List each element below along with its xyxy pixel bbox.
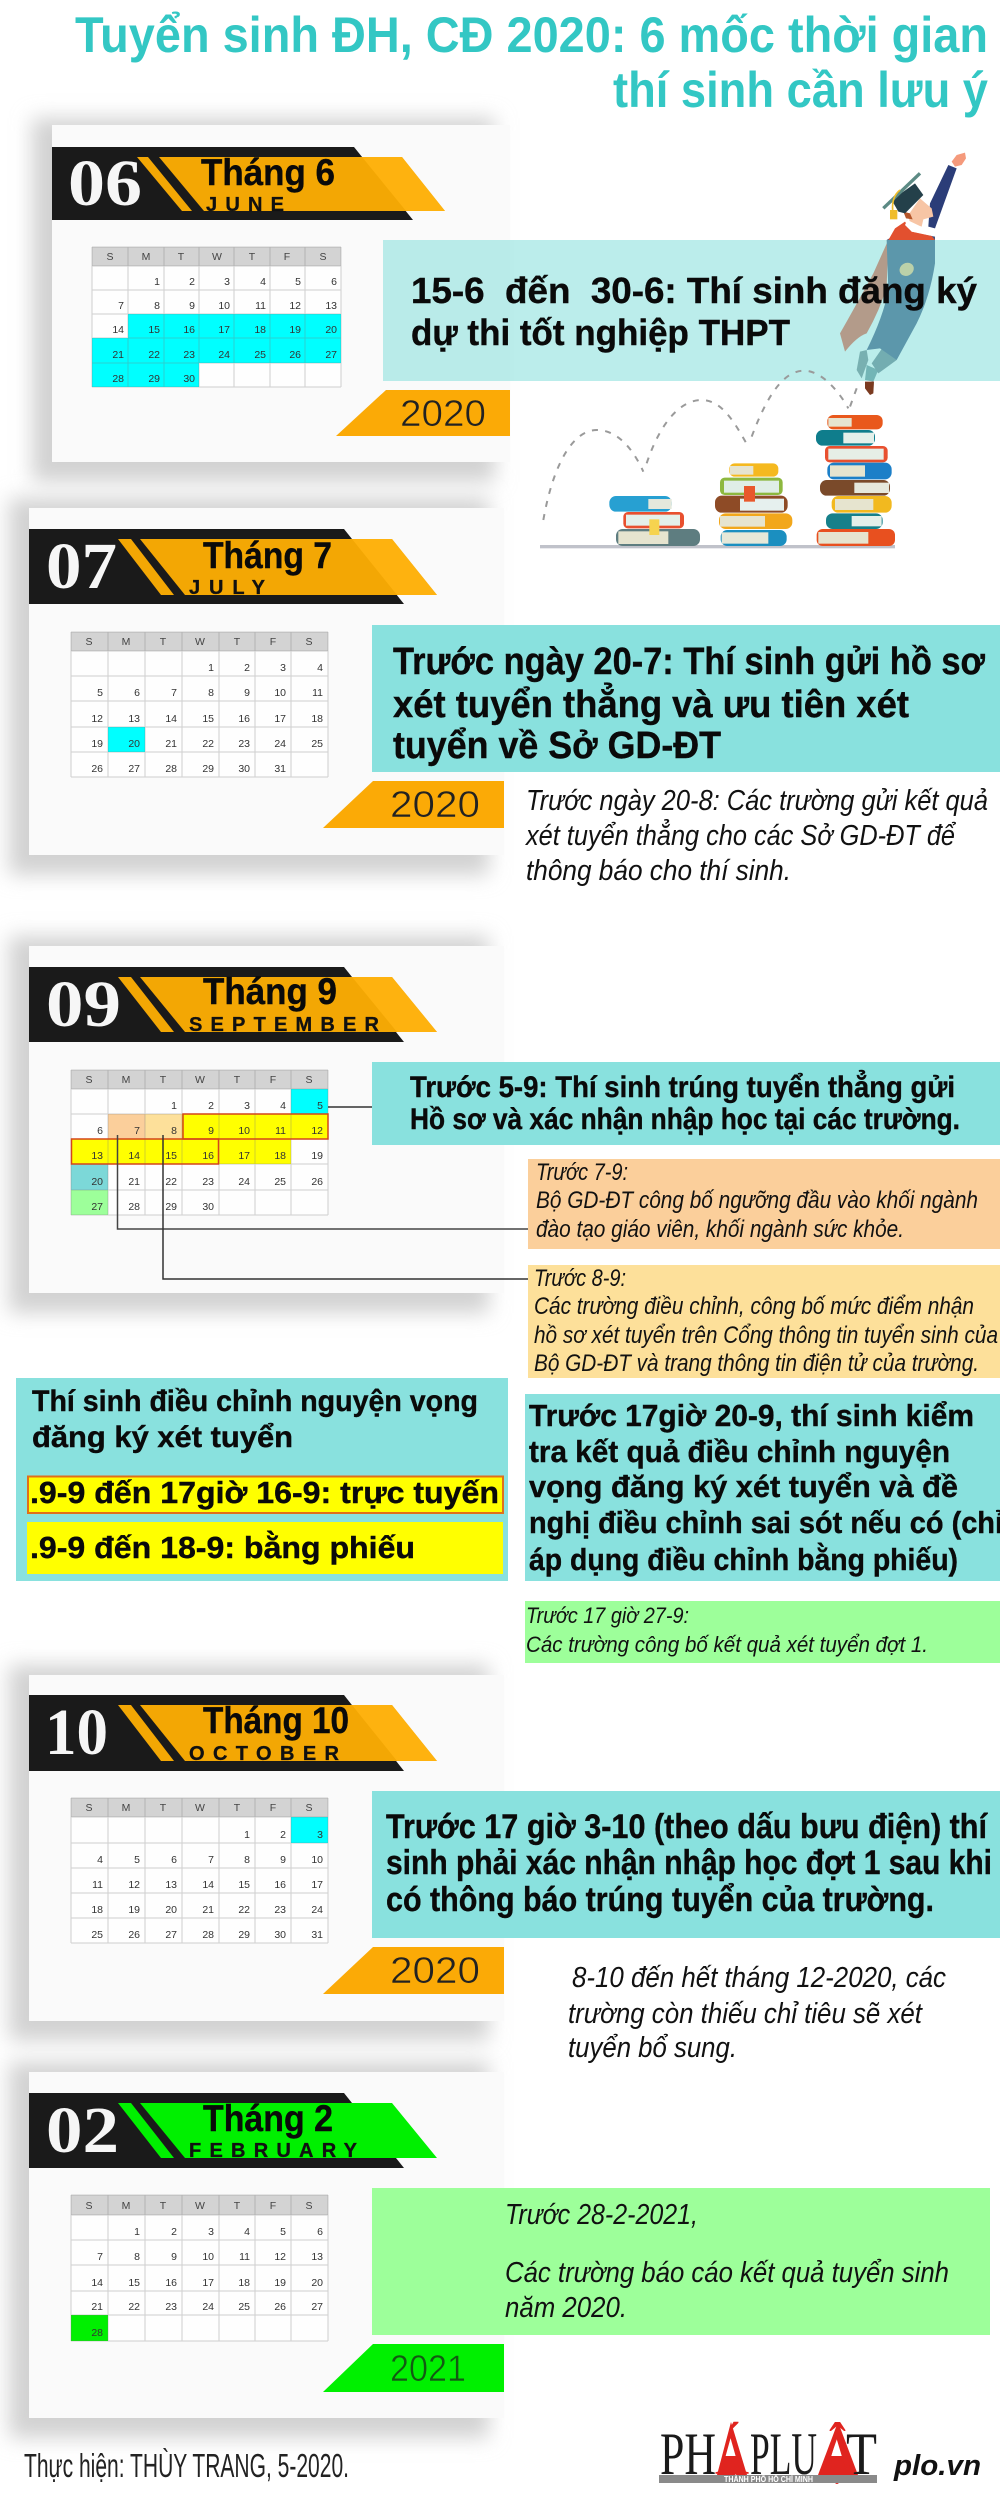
calendar: July 2020: 24: [274, 738, 286, 750]
callout: before 17h 20-9: vọng đăng ký xét tuyển và đề: [529, 1469, 958, 1504]
callout: before 5-9: [372, 1062, 1000, 1145]
calendar: July 2020: 20: [128, 738, 140, 750]
calendar: June 2020: S: [106, 251, 114, 263]
option: online: .9-9 đến 17giờ 16-9: trực tuyến: [30, 1475, 499, 1510]
calendar: June 2020: 16: [183, 324, 195, 336]
calendar: February 2021: 18: [238, 2277, 250, 2289]
calendar: September 2020: 15: [165, 1150, 177, 1162]
calendar: September 2020: F: [270, 1074, 276, 1086]
calendar: September 2020: 23: [202, 1176, 214, 1188]
calendar: October 2020: 8: [244, 1854, 250, 1866]
calendar: July 2020: 9: [244, 687, 250, 699]
callout: before 28-2-2021: [372, 2188, 990, 2335]
callout: before 17h 20-9: áp dụng điều chỉnh bằng phiếu): [529, 1541, 958, 1577]
calendar: February 2021: 22: [128, 2301, 140, 2313]
calendar: July 2020: 12: [91, 713, 103, 725]
calendar: June 2020: 12: [289, 300, 301, 312]
calendar: February 2021: S: [305, 2200, 313, 2212]
callout: before 28-2-2021: Trước 28-2-2021,: [505, 2199, 698, 2231]
year tag: 2020: 2020: [390, 784, 480, 825]
calendar: October 2020: W: [195, 1802, 205, 1814]
month banner: July: [29, 529, 437, 604]
month banner: September: Tháng 9: [203, 971, 337, 1012]
calendar: July 2020: 31: [274, 763, 286, 775]
calendar: February 2021: 13: [311, 2251, 323, 2263]
year tag: 2021: 2021: [390, 2348, 466, 2389]
calendar: September 2020: 19: [311, 1150, 323, 1162]
callout: before 20-7: [372, 625, 1000, 772]
year tag: 2020: [323, 781, 504, 828]
calendar: June 2020: 27: [325, 349, 337, 361]
calendar: October 2020: M: [122, 1802, 130, 1814]
month banner: September: 09: [46, 968, 121, 1041]
credit: Thực hiện: THÙY TRANG, 5-2020.: [24, 2447, 349, 2484]
calendar: October 2020: 6: [171, 1854, 177, 1866]
calendar: October 2020: S: [85, 1802, 93, 1814]
calendar: September 2020: 30: [202, 1201, 214, 1213]
calendar: February 2021: T: [160, 2200, 167, 2212]
calendar: February 2021: 23: [165, 2301, 177, 2313]
month banner: October: 10: [45, 1696, 108, 1769]
month banner: February: 02: [46, 2094, 119, 2167]
calendar: September 2020: [71, 1070, 328, 1215]
calendar: June 2020: S: [319, 251, 327, 263]
calendar: October 2020: 26: [128, 1929, 140, 1941]
calendar: July 2020: S: [85, 636, 93, 648]
calendar: June 2020: 21: [112, 349, 124, 361]
calendar: October 2020: 11: [92, 1879, 103, 1891]
calendar: October 2020: S: [305, 1802, 313, 1814]
calendar: July 2020: 13: [128, 713, 140, 725]
calendar: October 2020: 13: [165, 1879, 177, 1891]
text block: supplementary admission: trường còn thiếu chỉ tiêu sẽ xét: [568, 1998, 924, 2030]
calendar: July 2020: 4: [317, 662, 323, 674]
calendar: September 2020: 10: [238, 1125, 250, 1137]
calendar: October 2020: 25: [91, 1929, 103, 1941]
calendar: June 2020: 14: [112, 324, 124, 336]
calendar: June 2020: 10: [218, 300, 230, 312]
note: before 17h 27-9: Trước 17 giờ 27-9:: [526, 1603, 689, 1628]
calendar: February 2021: 10: [202, 2251, 214, 2263]
month banner: July: 07: [46, 530, 117, 603]
calendar: July 2020: 21: [165, 738, 177, 750]
calendar: July 2020: 17: [274, 713, 286, 725]
illustration: graduate student flying: [840, 153, 966, 395]
calendar: February 2021: F: [270, 2200, 276, 2212]
calendar: February 2021: 2: [171, 2226, 177, 2238]
callout: 15-6 to 30-6: 15-6 đến 30-6: Thí sinh đăng ký: [411, 270, 977, 311]
calendar: February 2021: S: [85, 2200, 93, 2212]
calendar: July 2020: T: [160, 636, 167, 648]
calendar: September 2020: 20: [91, 1176, 103, 1188]
calendar: July 2020: 3: [280, 662, 286, 674]
calendar: February 2021: 28: [91, 2327, 103, 2339]
calendar: October 2020: 1: [244, 1829, 250, 1841]
option: paper form: [27, 1522, 503, 1574]
text block: supplementary admission: [568, 1962, 946, 2064]
calendar: September 2020: 18: [274, 1150, 286, 1162]
calendar: October 2020: T: [234, 1802, 241, 1814]
calendar: July 2020: 28: [165, 763, 177, 775]
note: before 7-9: Trước 7-9:: [536, 1159, 628, 1186]
text block: before 20-8: thông báo cho thí sinh.: [526, 855, 791, 887]
calendar: July 2020: 27: [128, 763, 140, 775]
calendar: July 2020: 8: [208, 687, 214, 699]
calendar: October 2020: 5: [134, 1854, 140, 1866]
calendar: September 2020: 6: [97, 1125, 103, 1137]
calendar: July 2020: 6: [134, 687, 140, 699]
calendar: July 2020: 25: [311, 738, 323, 750]
panel: adjust preferences: đăng ký xét tuyển: [32, 1421, 293, 1454]
calendar: July 2020: W: [195, 636, 205, 648]
calendar: July 2020: F: [270, 636, 276, 648]
calendar: February 2021: 20: [311, 2277, 323, 2289]
note: before 8-9: Trước 8-9:: [534, 1265, 626, 1292]
option: paper form: .9-9 đến 18-9: bằng phiếu: [30, 1529, 415, 1565]
month banner: October: Tháng 10: [203, 1700, 349, 1741]
calendar: July 2020: 14: [165, 713, 177, 725]
calendar: September 2020: M: [122, 1074, 130, 1086]
calendar: September 2020: 11: [275, 1125, 286, 1137]
calendar: June 2020: T: [178, 251, 185, 263]
panel: June card: [32, 118, 510, 482]
logo: Pháp Luật: [659, 2421, 877, 2487]
calendar: February 2021: 9: [171, 2251, 177, 2263]
month banner: February: [29, 2093, 437, 2168]
calendar: June 2020: 18: [254, 324, 266, 336]
calendar: June 2020: 1: [154, 276, 160, 288]
month banner: July: JULY: [189, 577, 266, 599]
calendar: June 2020: 28: [112, 373, 124, 385]
calendar: June 2020: 22: [148, 349, 160, 361]
calendar: June 2020: 7: [118, 300, 124, 312]
calendar: October 2020: 17: [311, 1879, 323, 1891]
calendar: June 2020: 23: [183, 349, 195, 361]
calendar: February 2021: 19: [274, 2277, 286, 2289]
calendar: June 2020: 6: [331, 276, 337, 288]
calendar: October 2020: 23: [274, 1904, 286, 1916]
calendar: June 2020: 26: [289, 349, 301, 361]
calendar: October 2020: 24: [311, 1904, 323, 1916]
calendar: July 2020: S: [305, 636, 313, 648]
month banner: October: [29, 1695, 437, 1771]
calendar: July 2020: 30: [238, 763, 250, 775]
callout: before 17h 20-9: [525, 1394, 1000, 1581]
calendar: July 2020: 19: [91, 738, 103, 750]
month banner: June: Tháng 6: [201, 152, 335, 193]
calendar: June 2020: 3: [224, 276, 230, 288]
calendar: September 2020: S: [85, 1074, 93, 1086]
calendar: June 2020: T: [249, 251, 256, 263]
panel: adjust preferences: Thí sinh điều chỉnh nguyện vọng: [32, 1385, 478, 1418]
calendar: July 2020: 22: [202, 738, 214, 750]
calendar: October 2020: 20: [165, 1904, 177, 1916]
month banner: July: Tháng 7: [203, 535, 332, 576]
callout: before 20-7: xét tuyển thẳng và ưu tiên xét: [393, 681, 909, 726]
calendar: October 2020: T: [160, 1802, 167, 1814]
calendar: October 2020: 30: [274, 1929, 286, 1941]
calendar: October 2020: 12: [128, 1879, 140, 1891]
calendar: July 2020: 26: [91, 763, 103, 775]
calendar: July 2020: 15: [202, 713, 214, 725]
month banner: June: JUNE: [206, 194, 284, 216]
calendar: February 2021: 7: [97, 2251, 103, 2263]
month banner: June: 06: [68, 147, 142, 220]
arrow: 5-9 connector: [328, 1106, 382, 1108]
calendar: July 2020: T: [234, 636, 241, 648]
calendar: October 2020: 29: [238, 1929, 250, 1941]
calendar: September 2020: 4: [280, 1100, 286, 1112]
panel: September card: [9, 936, 504, 1313]
calendar: June 2020: 29: [148, 373, 160, 385]
calendar: February 2021: 21: [91, 2301, 103, 2313]
calendar: October 2020: 21: [202, 1904, 214, 1916]
calendar: February 2021: 1: [134, 2226, 140, 2238]
calendar: October 2020: 22: [238, 1904, 250, 1916]
logo: Pháp Luật: THÀNH PHỐ HỒ CHÍ MINH: [724, 2474, 813, 2484]
month banner: September: SEPTEMBER: [189, 1014, 380, 1036]
calendar: September 2020: T: [160, 1074, 167, 1086]
calendar: September 2020: T: [234, 1074, 241, 1086]
site name: plo.vn: [893, 2450, 981, 2482]
calendar: October 2020: 2: [280, 1829, 286, 1841]
text block: supplementary admission: 8-10 đến hết tháng 12-2020, các: [572, 1962, 946, 1994]
note: before 17h 27-9: Các trường công bố kết quả xét tuyển đợt 1.: [526, 1632, 928, 1657]
calendar: June 2020: 11: [255, 300, 266, 312]
logo: Pháp Luật: Á: [715, 2421, 749, 2487]
calendar: July 2020: 2: [244, 662, 250, 674]
calendar: June 2020: 4: [260, 276, 266, 288]
calendar: February 2021: 12: [274, 2251, 286, 2263]
callout: before 17h 3-10: [372, 1791, 1000, 1938]
year tag: 2021: [323, 2344, 504, 2392]
year tag: 2020: [323, 1947, 504, 1994]
calendar: June 2020: 30: [183, 373, 195, 385]
calendar: September 2020: 12: [311, 1125, 323, 1137]
year tag: 2020: 2020: [390, 1950, 480, 1991]
calendar: February 2021: 11: [239, 2251, 250, 2263]
calendar: September 2020: 2: [208, 1100, 214, 1112]
calendar: October 2020: 16: [274, 1879, 286, 1891]
calendar: June 2020: 15: [148, 324, 160, 336]
note: before 7-9: [528, 1159, 1000, 1249]
calendar: June 2020: 17: [218, 324, 230, 336]
calendar: June 2020: 13: [325, 300, 337, 312]
calendar: September 2020: 25: [274, 1176, 286, 1188]
month banner: October: OCTOBER: [189, 1743, 340, 1765]
calendar: October 2020: F: [270, 1802, 276, 1814]
calendar: July 2020: 1: [208, 662, 214, 674]
calendar: February 2021: W: [195, 2200, 205, 2212]
calendar: October 2020: 18: [91, 1904, 103, 1916]
calendar: June 2020: 25: [254, 349, 266, 361]
calendar: February 2021: 27: [311, 2301, 323, 2313]
callout: before 28-2-2021: Các trường báo cáo kết quả tuyển sinh: [505, 2257, 949, 2289]
calendar: June 2020: 19: [289, 324, 301, 336]
callout: before 17h 3-10: có thông báo trúng tuyển của trường.: [386, 1881, 934, 1919]
calendar: October 2020: 9: [280, 1854, 286, 1866]
calendar: February 2021: 15: [128, 2277, 140, 2289]
callout: 15-6 to 30-6: [383, 240, 1000, 381]
callout: before 17h 20-9: Trước 17giờ 20-9, thí sinh kiểm: [529, 1398, 974, 1433]
calendar: June 2020: [92, 247, 341, 387]
calendar: September 2020: 24: [238, 1176, 250, 1188]
calendar: September 2020: S: [305, 1074, 313, 1086]
calendar: February 2021: [71, 2195, 328, 2341]
calendar: September 2020: 5: [317, 1100, 323, 1112]
callout: before 28-2-2021: năm 2020.: [505, 2292, 627, 2324]
note: before 7-9: đào tạo giáo viên, khối ngành sức khỏe.: [536, 1216, 904, 1243]
calendar: September 2020: 1: [171, 1100, 177, 1112]
calendar: June 2020: F: [284, 251, 290, 263]
calendar: February 2021: T: [234, 2200, 241, 2212]
calendar: June 2020: 2: [189, 276, 195, 288]
calendar: September 2020: 8: [171, 1125, 177, 1137]
panel: October card: [9, 1665, 504, 2041]
calendar: February 2021: 25: [238, 2301, 250, 2313]
year tag: 2020: [336, 390, 510, 436]
calendar: September 2020: 27: [91, 1201, 103, 1213]
calendar: February 2021: 8: [134, 2251, 140, 2263]
calendar: July 2020: 5: [97, 687, 103, 699]
calendar: July 2020: 10: [274, 687, 286, 699]
month banner: June: [52, 147, 445, 220]
calendar: September 2020: 9: [208, 1125, 214, 1137]
calendar: October 2020: 31: [311, 1929, 323, 1941]
calendar: September 2020: 17: [238, 1150, 250, 1162]
calendar: February 2021: M: [122, 2200, 130, 2212]
calendar: October 2020: [71, 1798, 328, 1943]
title: [75, 7, 988, 118]
callout: before 5-9: Trước 5-9: Thí sinh trúng tuyển thẳng gửi: [410, 1070, 955, 1104]
illustration: book stacks with jump path: [540, 371, 895, 548]
calendar: October 2020: 14: [202, 1879, 214, 1891]
calendar: June 2020: M: [142, 251, 150, 263]
logo: Pháp Luật: PH: [660, 2421, 716, 2487]
calendar: October 2020: 10: [311, 1854, 323, 1866]
calendar: October 2020: 19: [128, 1904, 140, 1916]
year tag: 2020: 2020: [400, 393, 486, 434]
calendar: September 2020: 7: [134, 1125, 140, 1137]
calendar: October 2020: 15: [238, 1879, 250, 1891]
calendar: February 2021: 5: [280, 2226, 286, 2238]
calendar: September 2020: W: [195, 1074, 205, 1086]
calendar: September 2020: 28: [128, 1201, 140, 1213]
calendar: July 2020: M: [122, 636, 130, 648]
calendar: July 2020: 29: [202, 763, 214, 775]
calendar: September 2020: 13: [91, 1150, 103, 1162]
calendar: June 2020: W: [212, 251, 222, 263]
month banner: September: [29, 967, 437, 1042]
calendar: September 2020: 26: [311, 1176, 323, 1188]
calendar: September 2020: 29: [165, 1201, 177, 1213]
calendar: June 2020: 8: [154, 300, 160, 312]
calendar: February 2021: 14: [91, 2277, 103, 2289]
calendar: July 2020: 23: [238, 738, 250, 750]
calendar: October 2020: 4: [97, 1854, 103, 1866]
calendar: February 2021: 26: [274, 2301, 286, 2313]
month banner: February: Tháng 2: [203, 2098, 333, 2139]
callout: 15-6 to 30-6: dự thi tốt nghiệp THPT: [411, 312, 790, 353]
calendar: February 2021: 6: [317, 2226, 323, 2238]
month banner: February: FEBRUARY: [189, 2140, 358, 2162]
calendar: September 2020: 16: [202, 1150, 214, 1162]
calendar: February 2021: 17: [202, 2277, 214, 2289]
text block: before 20-8: [524, 785, 988, 887]
calendar: October 2020: 3: [317, 1829, 323, 1841]
panel: February card: [9, 2062, 504, 2438]
calendar: July 2020: 11: [312, 687, 323, 699]
logo: Pháp Luật: T: [846, 2421, 877, 2487]
panel: adjust preferences: [16, 1378, 508, 1581]
calendar: July 2020: 16: [238, 713, 250, 725]
calendar: October 2020: 27: [165, 1929, 177, 1941]
panel: July card: [9, 498, 504, 875]
logo: Pháp Luật: Ậ: [820, 2421, 856, 2487]
arrow: 8-9 connector: [163, 1135, 533, 1279]
calendar: February 2021: 24: [202, 2301, 214, 2313]
callout: before 17h 20-9: tra kết quả điều chỉnh nguyện: [529, 1434, 950, 1469]
text block: supplementary admission: tuyển bổ sung.: [568, 2032, 737, 2064]
callout: before 20-7: tuyển về Sở GD-ĐT: [393, 725, 721, 767]
calendar: February 2021: 16: [165, 2277, 177, 2289]
calendar: July 2020: 18: [311, 713, 323, 725]
calendar: September 2020: 14: [128, 1150, 140, 1162]
calendar: June 2020: 20: [325, 324, 337, 336]
note: before 17h 27-9: [525, 1601, 1000, 1663]
calendar: September 2020: 22: [165, 1176, 177, 1188]
calendar: September 2020: 21: [128, 1176, 140, 1188]
calendar: February 2021: 3: [208, 2226, 214, 2238]
calendar: June 2020: 9: [189, 300, 195, 312]
arrow: 7-9 connector: [118, 1135, 533, 1229]
calendar: June 2020: 24: [218, 349, 230, 361]
calendar: October 2020: 28: [202, 1929, 214, 1941]
calendar: October 2020: 7: [208, 1854, 214, 1866]
calendar: September 2020: 3: [244, 1100, 250, 1112]
calendar: July 2020: 7: [171, 687, 177, 699]
note: before 8-9: [528, 1265, 1000, 1378]
calendar: February 2021: 4: [244, 2226, 250, 2238]
logo: Pháp Luật: PLU: [750, 2421, 817, 2487]
calendar: June 2020: 5: [295, 276, 301, 288]
calendar: July 2020: [71, 632, 328, 777]
